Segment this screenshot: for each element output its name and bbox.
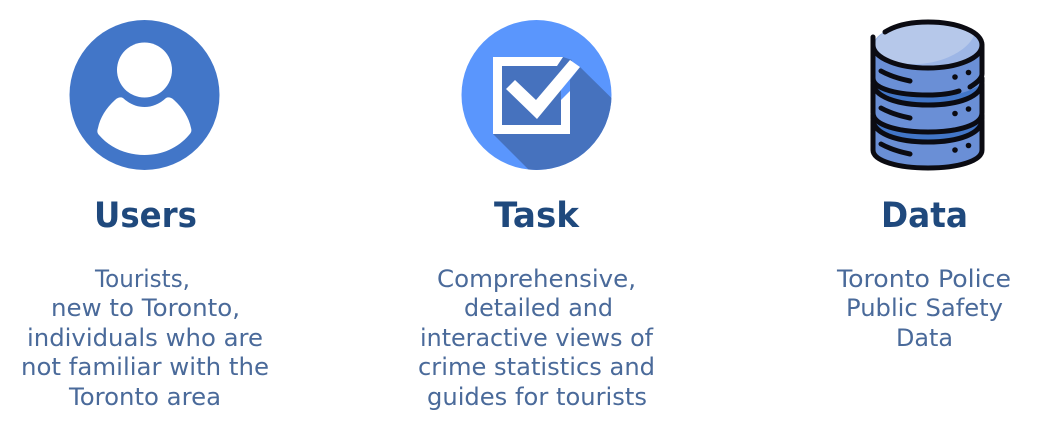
text block: users description: individuals who are	[27, 324, 263, 352]
text block: task description: detailed and	[464, 294, 613, 322]
text block: task description: interactive views of	[420, 324, 654, 352]
text block: users description: Toronto area	[68, 383, 221, 411]
text block: users description: new to Toronto,	[51, 294, 240, 322]
icon: user	[70, 20, 220, 170]
text block: task description	[418, 265, 655, 411]
text block: data description: Toronto Police	[836, 265, 1011, 293]
heading: Task: Task	[494, 196, 580, 236]
text block: data description: Public Safety	[846, 294, 1003, 322]
text block: data description: Data	[896, 324, 953, 352]
heading: Users: Users	[94, 196, 197, 236]
icon: task checkbox	[462, 20, 612, 170]
text block: users description: Tourists,	[94, 265, 190, 293]
text block: users description: not familiar with the	[21, 353, 269, 381]
text block: task description: crime statistics and	[418, 353, 655, 381]
icon: database	[873, 22, 982, 168]
text block: data description	[836, 265, 1011, 352]
text block: task description: guides for tourists	[427, 383, 647, 411]
heading: Data: Data	[881, 196, 968, 236]
text block: users description	[21, 265, 269, 411]
text block: task description: Comprehensive,	[437, 265, 636, 293]
